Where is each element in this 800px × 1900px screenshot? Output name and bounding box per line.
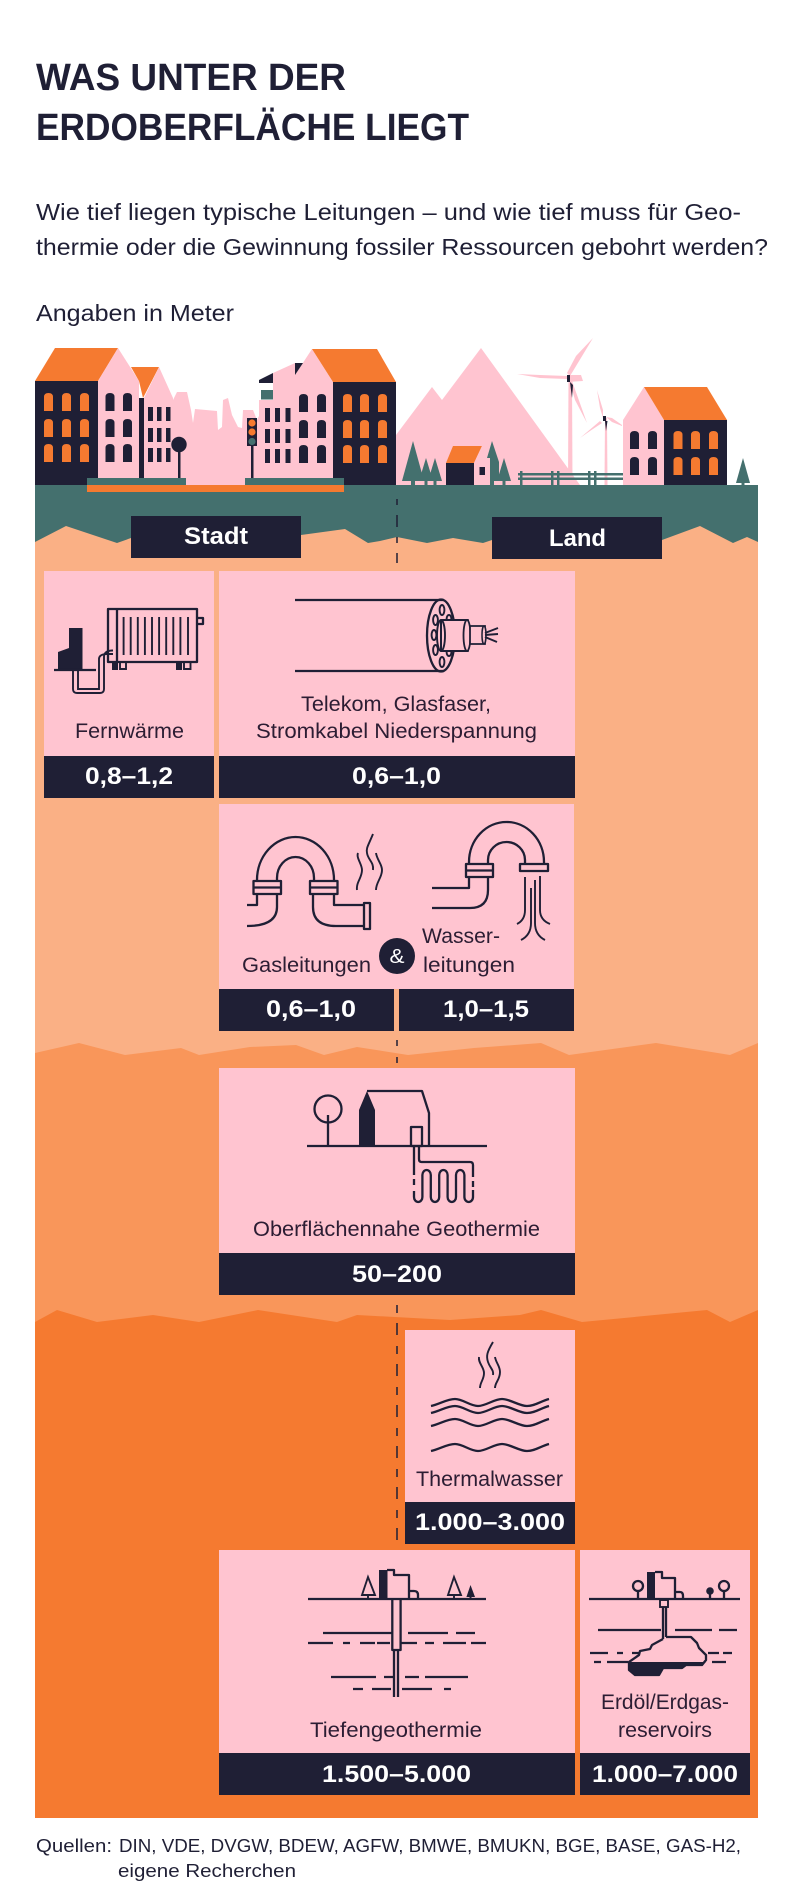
unit note: Angaben in Meter: [36, 300, 234, 326]
layer: middle: [35, 500, 758, 1322]
title: [36, 57, 469, 149]
text: Telekom label: [256, 693, 537, 743]
layer: topsoil: [35, 485, 758, 543]
panel: Fernwärme: [44, 571, 214, 798]
wind turbine large: [517, 338, 593, 485]
icon: house with ground collector: [307, 1091, 487, 1202]
icon: deep borehole: [308, 1570, 486, 1697]
value bar: Wasser depth: [399, 989, 574, 1031]
countryside house large: [623, 387, 727, 485]
icon: gas pipe: [247, 834, 382, 929]
layer: shallow: [35, 500, 758, 1055]
text: Thermalwasser: Thermalwasser: [416, 1468, 563, 1491]
mountains: [396, 348, 580, 485]
text: Telekom label: Stromkabel Niederspannung: [256, 720, 537, 743]
skyline: city and countryside above ground: [35, 338, 750, 485]
underground layers: [35, 478, 758, 1818]
dashed divider between city and land: [396, 499, 398, 1550]
value: Fernwärme depth: 0,8–1,2: [85, 763, 173, 790]
label: Stadt: Stadt: [184, 523, 248, 550]
icon: steam and water waves: [431, 1342, 549, 1451]
icon: cable cross-section: [295, 600, 498, 672]
background city silhouette: [173, 392, 262, 485]
text: Wasserleitungen: leitungen: [423, 954, 515, 977]
panel: Gas- und Wasserleitungen: [219, 804, 574, 1031]
subtitle: [36, 199, 768, 260]
layer: deep orange background: [35, 485, 758, 1818]
countryside house small: [446, 446, 490, 485]
icon: ampersand badge: &: [390, 946, 405, 968]
text: Wasserleitungen: [422, 925, 515, 977]
text: Tiefengeothermie: Tiefengeothermie: [310, 1719, 482, 1742]
value bar: Gas depth: [219, 989, 394, 1031]
right townhouse group: [259, 349, 396, 485]
panel: Oberflächennahe Geothermie: [219, 1068, 575, 1295]
subtitle: thermie oder die Gewinnung fossiler Ressourcen gebohrt werden?: [36, 234, 768, 260]
panel: Erdöl/Erdgas-Reservoirs: [580, 1550, 750, 1795]
icon: water pipe: [432, 822, 550, 940]
fence: [518, 471, 623, 485]
value: Thermalwasser depth: 1.000–3.000: [415, 1509, 565, 1536]
label: Land: Land: [549, 525, 606, 552]
sources: Quellen:: [36, 1836, 112, 1856]
panel: Tiefengeothermie: [219, 1550, 575, 1795]
label: Stadt: [131, 516, 301, 558]
icon: oil and gas reservoir: [589, 1572, 740, 1675]
text: Oberflächennahe Geothermie: Oberflächennahe Geothermie: [253, 1218, 540, 1241]
panel: Thermalwasser: [405, 1330, 575, 1544]
sources: DIN, VDE, DVGW, BDEW, AGFW, BMWE, BMUKN, BGE, BASE, GAS-H2,: [119, 1836, 741, 1856]
left townhouse group: [35, 348, 173, 485]
street lamp: [171, 437, 187, 478]
wind turbine small: [580, 390, 622, 485]
road: [87, 478, 344, 492]
value: Telekom depth: 0,6–1,0: [352, 763, 441, 790]
icon: radiator with district heating pipe: [54, 609, 203, 693]
value bar: Wasser depth: 1,0–1,5: [443, 996, 529, 1023]
panel: Telekom, Glasfaser, Stromkabel: [219, 571, 575, 798]
text: Telekom label: Telekom, Glasfaser,: [301, 693, 491, 716]
text: Wasserleitungen: Wasser-: [422, 925, 500, 948]
value bar: Gas depth: 0,6–1,0: [266, 996, 356, 1023]
text: Erdöl/Erdgas-Reservoirs: Erdöl/Erdgas-: [601, 1691, 729, 1714]
value: Tiefengeothermie depth: 1.500–5.000: [322, 1761, 471, 1788]
title: WAS UNTER DER: [36, 57, 346, 99]
text: Erdöl/Erdgas-Reservoirs: [601, 1691, 729, 1742]
traffic light: [247, 418, 257, 478]
value: Erdöl depth: 1.000–7.000: [592, 1761, 738, 1788]
text: Gasleitungen: Gasleitungen: [242, 954, 371, 977]
text: Erdöl/Erdgas-Reservoirs: reservoirs: [618, 1719, 712, 1742]
subtitle: Wie tief liegen typische Leitungen – und wie tief muss für Geo-: [36, 199, 741, 225]
icon: ampersand badge: [379, 938, 415, 974]
sources: eigene Recherchen: [118, 1861, 296, 1881]
text: Fernwärme: Fernwärme: [75, 720, 184, 743]
title: ERDOBERFLÄCHE LIEGT: [36, 106, 469, 149]
sources: [36, 1836, 741, 1881]
label: Land: [492, 517, 662, 559]
value: Oberflächennahe Geothermie depth: 50–200: [352, 1261, 442, 1288]
trees: [402, 441, 750, 485]
